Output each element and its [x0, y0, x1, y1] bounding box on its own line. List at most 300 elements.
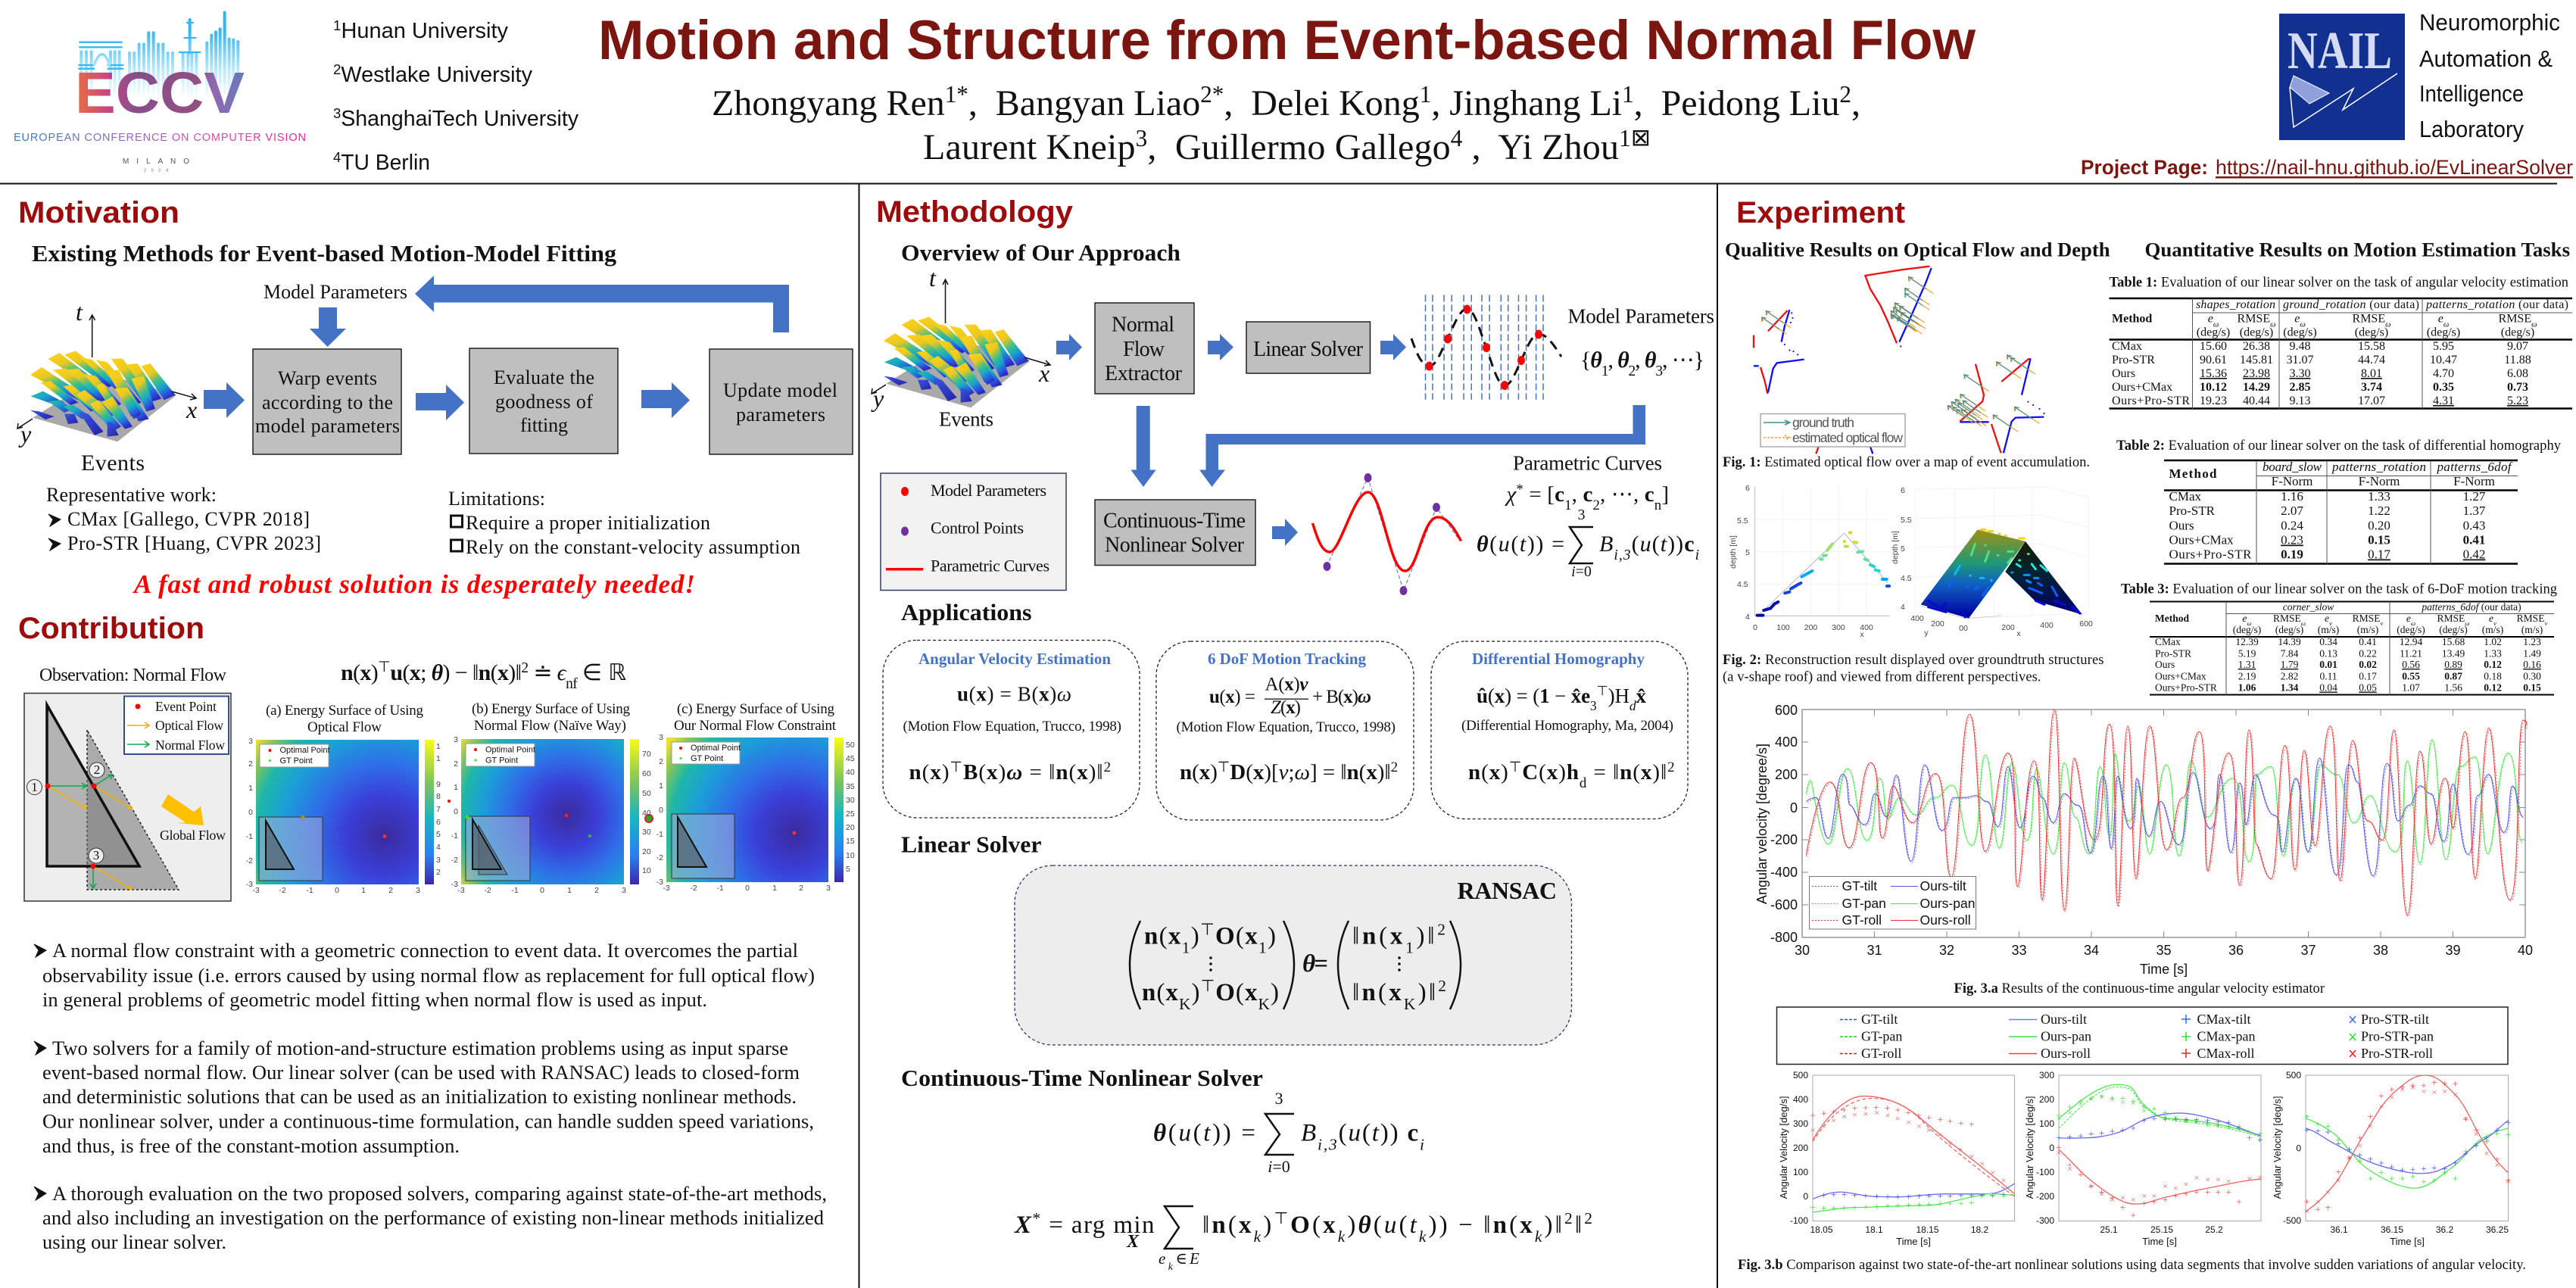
arrow: warp to evaluate: [416, 385, 464, 420]
logo: ECCV: ECCV: [75, 61, 245, 126]
card: 6 dof motion tracking: n(x)⊤D(x)[v;ω] = ‖n(x)‖2: [1180, 759, 1398, 784]
chart: fig 2 reconstruction: 200: [1804, 623, 1817, 632]
logo: ECCV: MILANO: [123, 157, 189, 166]
table 1: 14.29: [2243, 381, 2270, 394]
logo: ECCV: [14, 13, 306, 173]
chart: energy surface a: 9: [436, 780, 441, 789]
card: ransac system: ‖n(x1)‖2: [1352, 921, 1445, 957]
text: contribution bullets: A thorough evaluation on the two proposed solvers, comparing against state-of-the-art methods,: [52, 1182, 827, 1205]
formula: spline definition: [1153, 1089, 1424, 1176]
legend: fig 3b: GT-roll: [1861, 1046, 1901, 1061]
table 3: 0.13: [2319, 648, 2337, 659]
chart: energy surface b: 60: [642, 769, 651, 778]
chart: fig 2 reconstruction: 400: [1910, 614, 1924, 623]
legend: fig 3b: [1776, 1007, 2508, 1065]
figure: normal flow diagram: Normal Flow: [155, 738, 225, 753]
text: representative work: CMax [Gallego, CVPR 2018]: [67, 508, 310, 530]
chart: fig 3b segment 1: 18.1: [1865, 1224, 1883, 1235]
table 3: RMSEv: [2517, 613, 2547, 627]
table 2: 0.15: [2368, 533, 2390, 547]
table 3: 0.18: [2484, 671, 2502, 681]
chart: energy surface b: 2: [454, 759, 458, 769]
table 3: (m/s): [2482, 624, 2503, 635]
logo: NAIL: Neuromorphic: [2419, 9, 2560, 36]
chart: fig 2 reconstruction: 4.5: [1737, 580, 1748, 589]
chart: energy surface c: 3: [826, 884, 831, 893]
legend: [881, 473, 1066, 591]
affiliations: 3ShanghaiTech University: [333, 104, 579, 131]
chart: energy surface a: -3: [252, 886, 260, 895]
chart: energy surface a: 1: [361, 886, 366, 895]
chart: energy surface b: -3: [451, 880, 458, 889]
table 1: (deg/s): [2283, 326, 2317, 339]
formula: spline: [1477, 507, 1699, 580]
chart: energy surface c: 40: [846, 768, 855, 777]
table 2: 1.22: [2368, 504, 2390, 518]
table 1: 5.23: [2507, 395, 2528, 407]
chart: fig 2 reconstruction: depth [m]: [1729, 535, 1738, 569]
table 2: 0.20: [2368, 518, 2390, 533]
table 1: 0.35: [2433, 381, 2454, 394]
panel: experiment: [1723, 196, 2572, 1273]
arrow: [1380, 334, 1406, 360]
chart: energy surface b: 10: [642, 866, 651, 875]
chart: energy surface b: -2: [484, 886, 491, 895]
text: contribution bullets: Two solvers for a family of motion-and-structure estimation problems using as input sparse: [52, 1037, 788, 1059]
chart: fig 3b segment 3: 36.2: [2436, 1224, 2454, 1235]
table 1: CMax: [2112, 340, 2142, 353]
chart: fig 3a angular velocity: [1754, 703, 2533, 977]
table 3: 13.49: [2442, 648, 2465, 659]
table 2: patterns_6dof: [2437, 460, 2513, 474]
text: contribution bullets: observability issue (i.e. errors caused by using normal flow as replacement for full optical flow): [42, 964, 815, 987]
table 3: 12.94: [2400, 636, 2422, 647]
chart: fig 2 reconstruction: 4: [1745, 613, 1750, 622]
arrow: down into warp: [310, 307, 346, 347]
chart: fig 3a angular velocity: 32: [1939, 943, 1954, 958]
panel: motivation: [17, 196, 853, 599]
table 1: shapes_rotation: [2196, 298, 2275, 311]
table 3: RMSEω: [2273, 613, 2306, 627]
figure: normal flow diagram: Optical Flow: [155, 718, 223, 733]
chart: fig 2 reconstruction: 6: [1745, 484, 1750, 493]
subheading: quantitative results: Quantitative Results on Motion Estimation Tasks: [2144, 239, 2570, 260]
table 1: 26.38: [2243, 340, 2270, 353]
chart: sampled model parameters: [1411, 295, 1561, 400]
chart: fig 3a angular velocity: 0: [1790, 800, 1798, 816]
table 2: F-Norm: [2272, 474, 2312, 488]
arrow: parameters to continuous-time solver: [1199, 405, 1645, 487]
chart: energy surface c: 35: [846, 782, 855, 791]
table 1: eω: [2438, 312, 2449, 329]
card: ransac system: n(x1)⊤O(x1): [1144, 920, 1276, 957]
table 3: RMSEv: [2353, 613, 2383, 627]
table 1: Ours+CMax: [2112, 381, 2172, 394]
formula: optimization objective: [1014, 1206, 1592, 1272]
box: normal flow extractor: Flow: [1123, 338, 1165, 361]
chart: fig 2 reconstruction: 5.5: [1901, 516, 1912, 525]
table 3: 1.23: [2523, 636, 2541, 647]
formula: spline: Bi,3(u(t))ci: [1599, 532, 1699, 563]
affiliations: 1Hunan University: [333, 17, 508, 43]
chart: fig 3a angular velocity: GT-tilt: [1842, 878, 1877, 893]
arrow: events to warp: [204, 382, 245, 418]
table 3: 1.49: [2523, 648, 2541, 659]
formula: spline definition: 3: [1275, 1089, 1283, 1108]
chart: energy surface c: GT Point: [691, 754, 723, 763]
chart: energy surface a: 3: [416, 886, 420, 895]
chart: energy surface c: 45: [846, 754, 855, 763]
chart: fig 3b segment 1: [1778, 1070, 2015, 1247]
caption: fig 2: (a v-shape roof) and viewed from different perspectives.: [1723, 669, 2041, 685]
table 3: (m/s): [2357, 624, 2378, 635]
table 1: 17.07: [2358, 395, 2385, 407]
chart: energy surface a: 2: [388, 886, 393, 895]
table 1: RMSEω: [2238, 312, 2275, 329]
chart: energy surface a: 1: [436, 754, 441, 763]
table 1: patterns_rotation (our data): [2425, 298, 2568, 311]
chart: fig 2 reconstruction: 300: [1832, 623, 1845, 632]
chart: fig 3a angular velocity: -600: [1770, 897, 1798, 912]
chart: energy surface a: 3: [248, 737, 253, 746]
figure: normal flow diagram: 1: [31, 780, 38, 794]
table 3: Ours+CMax: [2155, 671, 2206, 681]
chart: energy surface a: -2: [246, 856, 253, 865]
chart: fig 3a angular velocity: 31: [1867, 943, 1882, 958]
text: representative work: [46, 484, 321, 554]
chart: fig 3b segment 1: 300: [1793, 1118, 1808, 1129]
table 1: eω: [2294, 312, 2306, 329]
formula: spline: 3: [1578, 507, 1586, 523]
subheading: continuous-time solver: Continuous-Time Nonlinear Solver: [901, 1065, 1263, 1091]
chart: energy surface a: 4: [436, 843, 441, 852]
figure: events: [17, 298, 197, 476]
table 3: 15.68: [2442, 636, 2465, 647]
legend: fig 3b: GT-pan: [1861, 1028, 1902, 1043]
table 3: [2121, 582, 2557, 695]
chart: energy surface c: -3: [663, 884, 670, 893]
chart: fig 3a angular velocity: 40: [2518, 943, 2533, 958]
chart: energy surface c: 5: [846, 865, 850, 874]
table 1: 4.70: [2433, 367, 2454, 380]
table 2: F-Norm: [2359, 474, 2400, 488]
box: update: parameters: [736, 404, 825, 426]
table 3: 1.56: [2444, 681, 2462, 694]
table 3: 0.12: [2484, 659, 2502, 670]
card: differential homography: [1431, 641, 1688, 819]
panel: methodology: [871, 195, 1714, 1272]
callout: needed: A fast and robust solution is desperately needed!: [133, 569, 695, 599]
chart: energy surface c: 0: [659, 806, 663, 815]
chart: energy surface a: GT Point: [280, 756, 313, 766]
table 2: Pro-STR: [2169, 504, 2216, 518]
table 3: Pro-STR: [2155, 648, 2191, 659]
table 3: (m/s): [2521, 624, 2543, 635]
figure: estimated optical flow: ground truth: [1792, 415, 1854, 430]
chart: energy surface c: 30: [846, 796, 855, 805]
formula: spline: θ(u(t)) =: [1477, 532, 1564, 557]
table 1: 15.60: [2200, 340, 2227, 353]
text: contribution bullets: A normal flow constraint with a geometric connection to event data. It overcomes the partial: [52, 939, 798, 962]
box: warp events: model parameters: [255, 415, 400, 437]
chart: energy surface c: 0: [745, 884, 750, 893]
heading: experiment: Experiment: [1736, 196, 1905, 229]
chart: fig 3b segment 2: 300: [2039, 1070, 2054, 1081]
table 3: eω: [2406, 613, 2415, 627]
caption: fig 3b: Fig. 3.b Comparison against two state-of-the-art nonlinear solutions using data segments that involve sudden variations of angular velocity.: [1738, 1258, 2526, 1273]
chart: energy surface c: 10: [846, 851, 855, 860]
table 1: 10.47: [2430, 354, 2457, 366]
chart: energy surface a: -1: [306, 886, 313, 895]
chart: fig 2 reconstruction: 4: [1901, 603, 1905, 612]
table 1: 15.58: [2358, 340, 2385, 353]
card: ransac system: RANSAC: [1457, 877, 1557, 904]
card: angular velocity estimation: Angular Velocity Estimation: [918, 650, 1111, 668]
figure: events: t: [76, 298, 83, 326]
formula: spline definition: i=0: [1268, 1157, 1290, 1176]
chart: fig 3b segment 3: -500: [2283, 1215, 2301, 1226]
legend: fig 3b: Pro-STR-pan: [2361, 1028, 2434, 1043]
text: contribution bullets: [34, 939, 827, 1253]
box: continuous-time nonlinear solver: Nonlinear Solver: [1105, 533, 1245, 557]
table 1: [2110, 276, 2572, 409]
chart: energy surface b: -2: [451, 856, 458, 865]
table 3: 14.39: [2278, 636, 2301, 647]
table 3: (deg/s): [2397, 624, 2425, 635]
box: linear solver: [1246, 322, 1371, 373]
box: evaluate: Evaluate the: [494, 366, 594, 388]
chart: fig 3b segment 1: 18.2: [1971, 1224, 1989, 1235]
box: normal flow extractor: Normal: [1112, 313, 1174, 336]
table 3: eω: [2242, 613, 2252, 627]
table 3: RMSEω: [2437, 613, 2469, 627]
table 3: Table 3: Evaluation of our linear solver on the task of 6-DoF motion tracking: [2121, 582, 2557, 597]
table 2: F-Norm: [2453, 474, 2495, 488]
logo: NAIL: Automation &: [2419, 45, 2553, 72]
formula: spline definition: θ(u(t)) =: [1153, 1119, 1255, 1146]
chart: energy surface b: [448, 701, 653, 895]
chart: energy surface a: 7: [436, 805, 441, 814]
table 1: (deg/s): [2240, 326, 2273, 339]
table 1: eω: [2208, 312, 2219, 329]
chart: energy surface b: -1: [511, 886, 519, 895]
subheading: existing methods: Existing Methods for Event-based Motion-Model Fitting: [32, 240, 617, 267]
chart: fig 3b segment 1: 0: [1803, 1191, 1808, 1202]
table 2: 1.27: [2463, 489, 2486, 504]
table 3: 0.16: [2523, 659, 2541, 670]
table 1: 145.81: [2240, 354, 2273, 366]
table 3: 0.30: [2523, 671, 2541, 681]
chart: fig 2 reconstruction: y: [1924, 628, 1929, 638]
table 1: Method: [2112, 312, 2152, 326]
table 3: Ours: [2155, 659, 2175, 670]
chart: fig 3a angular velocity: Ours-pan: [1920, 896, 1975, 911]
chart: fig 3a angular velocity: Ours-tilt: [1920, 878, 1966, 893]
chart: fig 3b segment 1: 400: [1793, 1094, 1808, 1105]
chart: fig 3b segment 1: -100: [1790, 1215, 1808, 1226]
chart: energy surface a: 2: [436, 868, 441, 877]
chart: fig 3b segment 3: 500: [2286, 1070, 2301, 1081]
card: ransac system: θ=: [1302, 950, 1328, 978]
chart: energy surface b: GT Point: [485, 756, 518, 765]
card: angular velocity estimation: n(x)⊤B(x)ω = ‖n(x)‖2: [909, 759, 1111, 784]
text: limitations: Rely on the constant-velocity assumption: [466, 536, 800, 558]
legend: fig 3b: CMax-roll: [2197, 1046, 2255, 1061]
legend: fig 3b: Ours-roll: [2041, 1046, 2091, 1061]
chart: fig 3a angular velocity: 33: [2011, 943, 2027, 958]
panel: contribution: [18, 612, 855, 1253]
table 3: 2.19: [2238, 671, 2256, 681]
chart: fig 3a angular velocity: 30: [1795, 943, 1810, 958]
chart: energy surface c: 2: [799, 884, 803, 893]
text: representative work: Pro-STR [Huang, CVPR 2023]: [67, 532, 321, 554]
chart: energy surface b: 50: [642, 789, 651, 798]
chart: fig 3b segment 1: 500: [1793, 1070, 1808, 1081]
table 1: 9.48: [2290, 340, 2311, 353]
card: differential homography: (Differential Homography, Ma, 2004): [1461, 718, 1673, 734]
chart: fig 3b segment 2: [2024, 1070, 2261, 1247]
chart: energy surface b: 0: [540, 886, 544, 895]
table 1: 19.23: [2200, 395, 2227, 407]
project page link: https://nail-hnu.github.io/EvLinearSolver: [2216, 156, 2573, 179]
chart: fig 3a angular velocity: Angular velocity [degree/s]: [1754, 744, 1770, 904]
subheading: qualitative results: Qualitive Results on Optical Flow and Depth: [1725, 239, 2110, 260]
table 2: Ours+CMax: [2169, 533, 2234, 547]
legend: fig 3b: Ours-pan: [2041, 1028, 2091, 1043]
chart: energy surface a: (a) Energy Surface of Using: [266, 703, 424, 719]
chart: fig 3a angular velocity: 37: [2300, 943, 2316, 958]
table 1: 44.74: [2358, 354, 2385, 366]
table 1: RMSEω: [2353, 312, 2390, 329]
text: contribution bullets: and thus, is free of the constant-motion assumption.: [42, 1134, 460, 1157]
table 1: 9.13: [2290, 395, 2311, 407]
chart: energy surface c: 25: [846, 809, 855, 819]
chart: energy surface a: 5: [436, 830, 441, 839]
chart: energy surface c: 1: [772, 884, 777, 893]
table 1: Ours: [2112, 367, 2135, 380]
formula: spline definition: Bi,3(u(t)) ci: [1301, 1119, 1424, 1154]
table 3: ev: [2325, 613, 2332, 627]
card: angular velocity estimation: u(x) = B(x)ω: [957, 683, 1071, 706]
formula: control points: χ* = [c1, c2, ⋯, cn]: [1504, 482, 1669, 513]
card: differential homography: Differential Homography: [1472, 650, 1645, 668]
chart: fig 2 reconstruction: 5: [1901, 544, 1905, 554]
table 1: Table 1: Evaluation of our linear solver on the task of angular velocity estimation: [2110, 276, 2568, 291]
figure: normal flow diagram: 2: [94, 763, 100, 777]
chart: energy surface a: -2: [279, 886, 286, 895]
table 1: (deg/s): [2501, 326, 2534, 339]
card: ransac system: ‖n(xK)‖2: [1352, 977, 1446, 1013]
formula: optimization objective: ‖n(xk)⊤O(xk)θ(u(tk)) − ‖n(xk)‖2‖2: [1202, 1208, 1592, 1246]
chart: energy surface c: Optimal Point: [691, 744, 741, 753]
chart: energy surface b: -1: [451, 831, 458, 840]
table 3: 1.79: [2281, 659, 2299, 670]
table 3: 0.41: [2359, 636, 2377, 647]
chart: fig 2 reconstruction: 0: [1753, 623, 1757, 632]
logo: NAIL: [2279, 9, 2560, 142]
card: 6 dof motion tracking: u(x) =: [1209, 687, 1255, 707]
legend: fig 3b: CMax-tilt: [2197, 1012, 2250, 1027]
authors: Laurent Kneip3, Guillermo Gallego4 , Yi Zhou1⊠: [923, 124, 1651, 167]
chart: energy surface a: -1: [246, 832, 253, 841]
table 3: 0.89: [2444, 659, 2462, 670]
table 1: RMSEω: [2499, 312, 2537, 329]
chart: fig 3b segment 3: 36.1: [2330, 1224, 2348, 1235]
text: contribution bullets: Our nonlinear solver, under a continuous-time formulation, can handle sudden speed variations,: [42, 1110, 814, 1133]
legend: Control Points: [931, 518, 1024, 538]
chart: fig 2 reconstruction: 200: [1931, 619, 1944, 628]
table 1: Ours+Pro-STR: [2112, 395, 2190, 407]
chart: fig 2 reconstruction: 400: [2040, 621, 2054, 630]
chart: energy surface b: -3: [457, 886, 465, 895]
formula: parameter set: {θ1, θ2, θ3, ⋯}: [1580, 348, 1704, 379]
chart: fig 2 reconstruction: x: [1860, 630, 1864, 639]
card: 6 dof motion tracking: 6 DoF Motion Tracking: [1208, 650, 1366, 668]
chart: fig 3a angular velocity: 36: [2228, 943, 2244, 958]
chart: energy surface c: 1: [659, 781, 663, 791]
table 3: 12.39: [2235, 636, 2259, 647]
chart: fig 2 reconstruction: 6: [1901, 486, 1905, 495]
table 3: (m/s): [2318, 624, 2339, 635]
box: warp events: [253, 349, 401, 454]
table 3: 1.31: [2238, 659, 2256, 670]
legend: fig 3b: GT-tilt: [1861, 1012, 1898, 1027]
chart: energy surface a: Optical Flow: [307, 719, 382, 735]
table 2: 0.41: [2463, 533, 2485, 547]
caption: fig 2: [1723, 653, 2104, 685]
table 2: CMax: [2169, 489, 2202, 504]
chart: energy surface c: 15: [846, 837, 855, 846]
figure: events: x: [1038, 360, 1049, 387]
table 3: 0.02: [2359, 659, 2377, 670]
table 2: 0.23: [2281, 533, 2303, 547]
card: angular velocity estimation: (Motion Flow Equation, Trucco, 1998): [903, 719, 1121, 734]
text: contribution bullets: event-based normal flow. Our linear solver (can be used with RANSAC) leads to closed-form: [42, 1061, 800, 1084]
table 2: 1.16: [2281, 489, 2303, 504]
box: normal flow extractor: Extractor: [1105, 362, 1183, 385]
box: update: [709, 349, 853, 454]
chart: energy surface b: 40: [642, 809, 651, 818]
table 1: 3.30: [2290, 367, 2311, 380]
table 2: Ours: [2169, 518, 2194, 533]
chart: energy surface c: 50: [846, 741, 855, 750]
card: ransac system: [1015, 865, 1572, 1045]
chart: fig 3b segment 1: 18.15: [1916, 1224, 1939, 1235]
caption: fig 2: Fig. 2: Reconstruction result displayed over groundtruth structures: [1723, 653, 2104, 668]
table 3: 1.06: [2238, 681, 2256, 694]
text: representative work: Representative work:: [46, 484, 217, 506]
table 1: 9.07: [2507, 340, 2528, 353]
chart: energy surface a: 1: [248, 784, 253, 793]
text: contribution bullets: in general problems of geometric model fitting when normal flow is used as input.: [42, 988, 707, 1011]
chart: fig 3a angular velocity: 39: [2445, 943, 2461, 958]
text: contribution bullets: and deterministic solutions that can be used as an initialization to existing nonlinear methods.: [42, 1085, 797, 1108]
figure: normal flow diagram: Global Flow: [160, 828, 226, 843]
chart: energy surface a: 3: [436, 856, 441, 865]
table 3: 7.84: [2281, 648, 2299, 659]
table 1: ground_rotation (our data): [2283, 298, 2419, 311]
chart: energy surface a: 0: [248, 808, 253, 817]
chart: energy surface c: [656, 701, 855, 893]
card: differential homography: û(x) = (1 − x̂e3⊤)Hdx̂: [1477, 684, 1646, 713]
authors: [712, 80, 1860, 167]
table 3: Method: [2155, 613, 2189, 624]
table 1: 4.31: [2433, 395, 2454, 407]
table 2: Method: [2169, 466, 2217, 481]
chart: energy surface b: 3: [454, 735, 458, 744]
card: angular velocity estimation: [883, 641, 1140, 818]
text: contribution bullets: using our linear solver.: [42, 1230, 226, 1253]
